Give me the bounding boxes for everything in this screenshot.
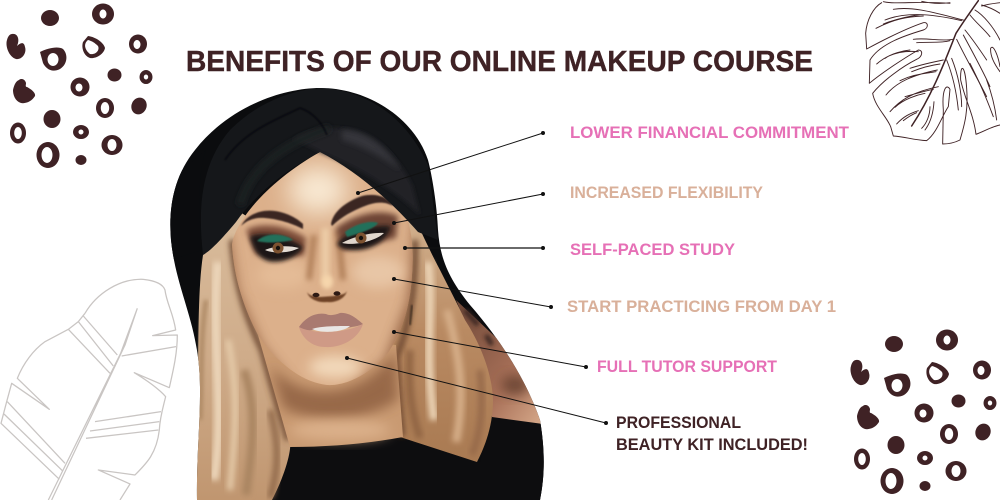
turban bbox=[170, 88, 438, 260]
monstera leaf line drawing: top right bbox=[866, 1, 1000, 144]
decorative dots cluster: top left bbox=[6, 4, 153, 168]
label: start practicing from day 1: START PRACTICING FROM DAY 1 bbox=[567, 298, 836, 316]
label: lower financial commitment: LOWER FINANCIAL COMMITMENT bbox=[570, 124, 849, 142]
leader line: increased flexibility bbox=[392, 192, 545, 225]
left hair bbox=[196, 214, 290, 500]
right eye bbox=[337, 222, 391, 250]
lips bbox=[299, 313, 363, 347]
neck bbox=[258, 335, 403, 447]
left eye bbox=[250, 234, 303, 262]
decorative dots cluster: bottom right bbox=[850, 330, 997, 494]
shirt bbox=[540, 422, 544, 500]
label: full tutor support: FULL TUTOR SUPPORT bbox=[597, 358, 777, 376]
leader line: self-paced study bbox=[403, 246, 545, 250]
leader line: professional beauty kit bbox=[345, 356, 608, 425]
brown eye shadow left bbox=[246, 225, 306, 256]
label: self-paced study: SELF-PACED STUDY bbox=[570, 241, 735, 259]
hand bbox=[456, 300, 540, 424]
right hair bbox=[393, 221, 493, 462]
label: professional beauty kit included: BEAUTY KIT INCLUDED! bbox=[616, 436, 808, 454]
banana leaf line drawing: bottom left bbox=[1, 279, 177, 500]
leader line: lower financial commitment bbox=[356, 131, 545, 195]
leader line: full tutor support bbox=[392, 330, 588, 369]
label: professional beauty kit included bbox=[616, 414, 808, 454]
portrait of model in blob mask bbox=[160, 80, 560, 500]
leader lines with dots bbox=[345, 131, 608, 425]
nose shading bbox=[307, 291, 347, 302]
title: BENEFITS OF OUR ONLINE MAKEUP COURSE bbox=[186, 46, 813, 78]
eyebrows bbox=[241, 195, 393, 229]
face bbox=[232, 152, 413, 386]
label: professional beauty kit included: PROFESSIONAL bbox=[616, 414, 741, 432]
leader line: start practicing bbox=[392, 277, 553, 309]
brown eye shadow right bbox=[336, 212, 398, 250]
label: increased flexibility: INCREASED FLEXIBILITY bbox=[570, 184, 763, 202]
